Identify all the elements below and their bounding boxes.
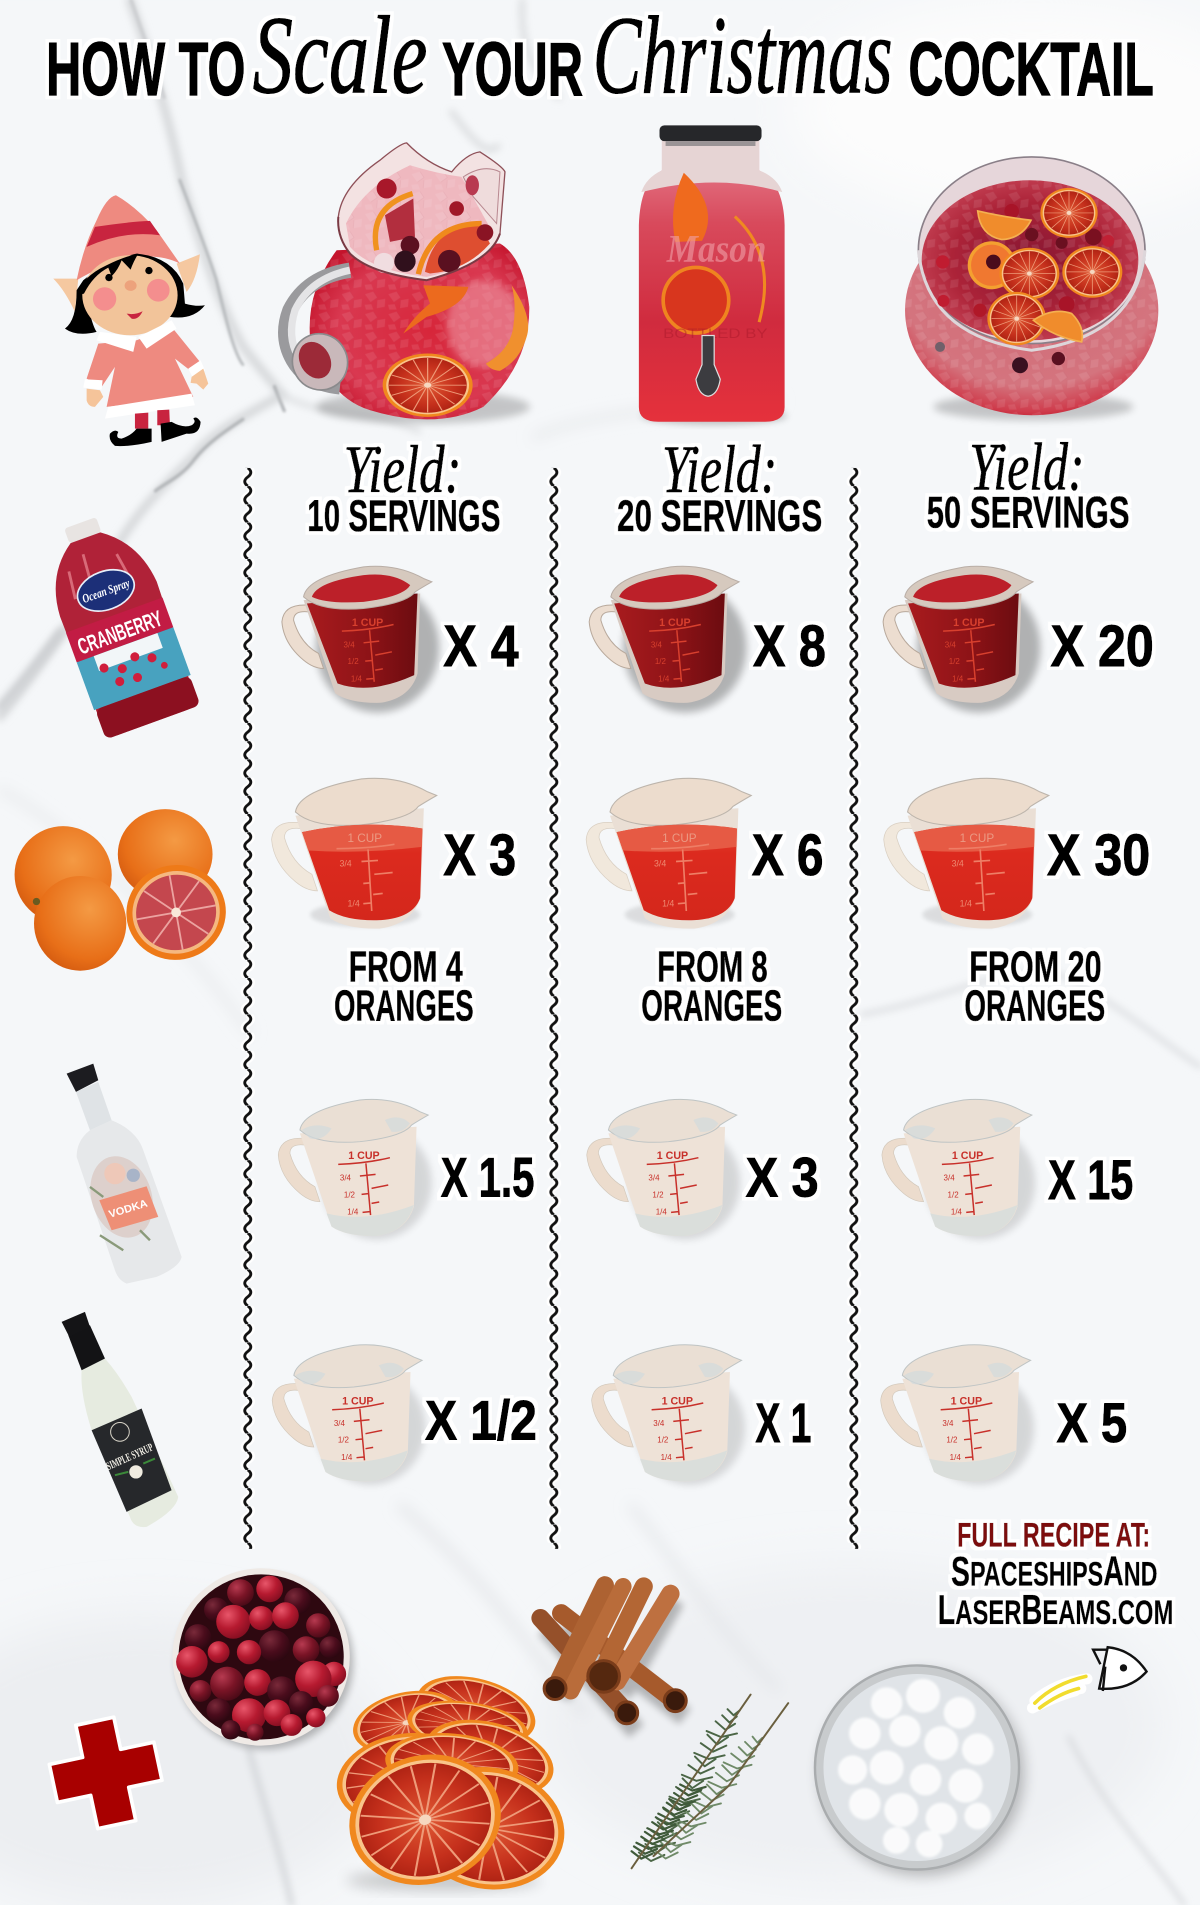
cup: cranberry juice: 1/2 [655, 657, 666, 666]
cup: orange juice [586, 778, 751, 929]
yield heading: 20 servings: Yield: [662, 431, 777, 507]
cup: cranberry juice [589, 566, 746, 712]
yield heading: 50 servings: Yield: [969, 429, 1085, 505]
multiplier: X 8 [753, 614, 826, 679]
cup: orange juice: 3/4 [654, 858, 666, 868]
row: simple syrup, column 1 [272, 1345, 537, 1485]
cup: cranberry juice: 1 CUP [953, 617, 984, 629]
cup: simple syrup: 3/4 [334, 1419, 345, 1428]
icon: rosemary sprig [632, 1695, 788, 1868]
icon: simple syrup bottle: SIMPLE SYRUP [105, 1442, 155, 1473]
cup: simple syrup: 1/2 [338, 1436, 349, 1445]
cup: vodka: 1/4 [951, 1208, 963, 1217]
cup: vodka: 3/4 [340, 1174, 352, 1183]
yield heading: 50 servings [927, 429, 1130, 537]
cup: vodka: 3/4 [944, 1174, 955, 1183]
multiplier: X 1 [755, 1391, 811, 1454]
note: from 20 oranges [964, 943, 1105, 1031]
cup: simple syrup: 1/4 [661, 1453, 672, 1462]
row: orange juice, column 3 [884, 778, 1150, 1031]
cup: cranberry juice: 1/2 [348, 657, 359, 666]
note: from 4 oranges: FROM 4 [349, 943, 463, 992]
yield heading: 10 servings: 10 SERVINGS [307, 490, 500, 541]
icon: elf [53, 195, 208, 446]
cup: simple syrup: 3/4 [653, 1419, 665, 1428]
icon: red plus sign [43, 1710, 169, 1836]
cup: simple syrup: 1/2 [657, 1436, 669, 1445]
cup: simple syrup: 1 CUP [662, 1395, 693, 1407]
cup: simple syrup: 1/4 [950, 1453, 961, 1462]
row: vodka, column 1 [278, 1099, 534, 1239]
note: from 8 oranges: FROM 8 [657, 943, 768, 992]
divider 2 [544, 468, 564, 1549]
icon: cranberry juice bottle: CRANBERRY [74, 606, 166, 659]
divider 3 [844, 468, 864, 1549]
yield heading: 10 servings [307, 431, 500, 541]
row: orange juice, column 1 [272, 778, 516, 1031]
row: cranberry juice, column 3 [883, 566, 1154, 712]
divider 1 [238, 468, 257, 1549]
icon: vodka bottle: VODKA [107, 1198, 149, 1221]
cup: cranberry juice: 1 CUP [352, 617, 383, 629]
note: from 8 oranges: ORANGES [641, 982, 782, 1031]
cup: vodka: 1/2 [652, 1190, 664, 1199]
yield heading: 10 servings: Yield: [344, 431, 462, 507]
cup: vodka: 1 CUP [952, 1150, 983, 1162]
title [46, 0, 1154, 118]
note: from 20 oranges: ORANGES [964, 982, 1105, 1031]
cup: orange juice: 1 CUP [960, 832, 994, 845]
cup: orange juice [884, 778, 1049, 929]
cup: vodka [587, 1099, 740, 1239]
cup: simple syrup: 1 CUP [951, 1395, 982, 1407]
cup: vodka: 1/4 [656, 1208, 667, 1217]
full recipe credit: SPACESHIPSAND [951, 1548, 1157, 1594]
cup: vodka: 1/4 [347, 1208, 359, 1217]
title: YOUR [442, 27, 583, 111]
cup: vodka: 1/2 [344, 1190, 356, 1199]
multiplier: X 3 [746, 1146, 819, 1209]
cup: cranberry juice [282, 566, 439, 712]
icon: pitcher with punch [282, 143, 530, 424]
cup: cranberry juice: 1/4 [351, 674, 363, 683]
cup: cranberry juice: 1/2 [949, 657, 960, 666]
note: from 8 oranges [641, 943, 782, 1031]
cup: vodka: 1 CUP [348, 1150, 380, 1162]
cup: cranberry juice: 3/4 [945, 640, 956, 649]
multiplier: X 5 [1057, 1391, 1127, 1454]
row: vodka, column 3 [882, 1099, 1133, 1239]
icon: cranberry juice bottle [32, 505, 202, 740]
yield heading: 20 servings: 20 SERVINGS [617, 490, 822, 541]
multiplier: X 20 [1051, 614, 1154, 679]
icon: mason jar dispenser [639, 125, 787, 424]
cup: cranberry juice [883, 566, 1040, 712]
multiplier: X 6 [752, 823, 823, 888]
cup: orange juice: 3/4 [952, 858, 964, 868]
icon: rocket [1032, 1647, 1147, 1708]
cup: orange juice: 1/4 [960, 899, 972, 909]
cup: orange juice: 1 CUP [348, 832, 382, 845]
cup: orange juice: 1 CUP [662, 832, 697, 845]
note: from 4 oranges [334, 943, 474, 1031]
row: cranberry juice, column 2 [589, 566, 826, 712]
cup: cranberry juice: 1 CUP [659, 617, 691, 629]
cup: simple syrup: 1/2 [946, 1436, 958, 1445]
icon: mason jar dispenser: Mason [666, 227, 766, 270]
cup: vodka: 1 CUP [657, 1150, 688, 1162]
icon: simple syrup bottle [62, 1312, 178, 1527]
row: cranberry juice, column 1 [282, 566, 519, 712]
title: HOW TO [46, 27, 245, 111]
row: simple syrup, column 3 [881, 1345, 1127, 1485]
cup: simple syrup: 3/4 [942, 1419, 954, 1428]
multiplier: X 4 [443, 614, 519, 679]
cup: simple syrup [881, 1345, 1034, 1485]
multiplier: X 30 [1047, 823, 1150, 888]
icon: cinnamon sticks [540, 1585, 686, 1731]
cup: cranberry juice: 3/4 [651, 640, 662, 649]
full recipe credit [938, 1516, 1173, 1633]
cup: vodka [278, 1099, 432, 1239]
cup: orange juice: 1/4 [348, 899, 360, 909]
multiplier: X 1.5 [441, 1146, 534, 1209]
cup: cranberry juice: 1/4 [658, 674, 670, 683]
note: from 4 oranges: ORANGES [334, 982, 474, 1031]
cup: orange juice [272, 778, 437, 929]
cup: vodka: 3/4 [648, 1174, 660, 1183]
cup: orange juice: 3/4 [339, 858, 352, 868]
cup: cranberry juice: 3/4 [344, 640, 355, 649]
icon: blood oranges [15, 809, 233, 971]
cup: vodka [882, 1099, 1035, 1239]
icon: bowl of sugar [815, 1665, 1024, 1876]
cup: simple syrup: 1 CUP [342, 1395, 374, 1407]
cup: vodka: 1/2 [948, 1190, 959, 1199]
cup: simple syrup [592, 1345, 745, 1485]
icon: blood orange slices [331, 1664, 574, 1902]
yield heading: 20 servings [617, 431, 822, 541]
cup: cranberry juice: 1/4 [952, 674, 964, 683]
multiplier: X 3 [443, 823, 516, 888]
icon: mason jar dispenser: BOTTLED BY [663, 326, 768, 341]
icon: bowl of cranberries [172, 1568, 353, 1749]
cup: simple syrup: 1/4 [341, 1453, 353, 1462]
icon: cranberry juice bottle: Ocean Spray [80, 576, 132, 606]
multiplier: X 15 [1048, 1148, 1133, 1211]
row: orange juice, column 2 [586, 778, 823, 1031]
row: simple syrup, column 2 [592, 1345, 811, 1485]
cup: orange juice: 1/4 [662, 899, 674, 909]
note: from 20 oranges: FROM 20 [969, 943, 1102, 992]
row: vodka, column 2 [587, 1099, 819, 1239]
icon: vodka bottle [67, 1064, 182, 1284]
multiplier: X 1/2 [425, 1389, 537, 1452]
icon: punch bowl [905, 157, 1158, 420]
cup: simple syrup [272, 1345, 425, 1485]
